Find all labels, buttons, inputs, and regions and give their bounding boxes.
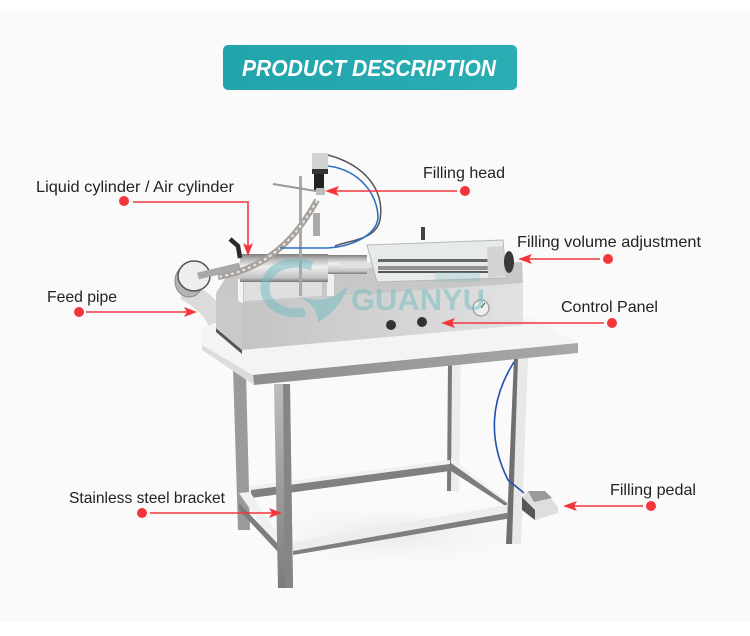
callout: control panel: Control Panel: [561, 299, 658, 316]
title badge: [223, 45, 517, 90]
title badge: PRODUCT DESCRIPTION: [242, 55, 496, 81]
vertical rod: [299, 176, 302, 296]
pressure gauge: [473, 300, 489, 316]
table top: [202, 318, 578, 385]
callout: stainless steel bracket: [69, 490, 282, 518]
watermark: [265, 263, 485, 322]
machine body: [216, 262, 523, 354]
air hoses: [328, 155, 381, 246]
callout: filling pedal: [563, 482, 696, 511]
feed pipe: [185, 290, 218, 322]
callout: control panel: [441, 299, 658, 328]
blue air hose to pedal: [494, 362, 524, 493]
callout: filling head: [325, 165, 505, 196]
filling head: [273, 153, 328, 236]
machine illustration: [175, 153, 578, 588]
control knobs: [386, 317, 427, 330]
table frame: [233, 358, 528, 588]
callout: liquid cylinder: [36, 179, 253, 256]
callout: filling pedal: Filling pedal: [610, 482, 696, 499]
callout: feed pipe: Feed pipe: [47, 289, 117, 306]
callout: liquid cylinder: Liquid cylinder / Air cylinder: [36, 179, 235, 196]
clear hose: [218, 200, 317, 277]
foot pedal: [522, 491, 558, 520]
inlet flange: [175, 239, 240, 297]
cylinders: [240, 227, 514, 282]
callout: feed pipe: [47, 289, 197, 317]
callout: filling volume adjustment: [517, 234, 702, 264]
callout: filling volume adjustment: Filling volume adjustment: [517, 234, 702, 251]
floor shadow: [220, 497, 560, 573]
callout: filling head: Filling head: [423, 165, 505, 182]
watermark: GUANYU: [351, 284, 485, 317]
callout: stainless steel bracket: Stainless steel bracket: [69, 490, 226, 507]
